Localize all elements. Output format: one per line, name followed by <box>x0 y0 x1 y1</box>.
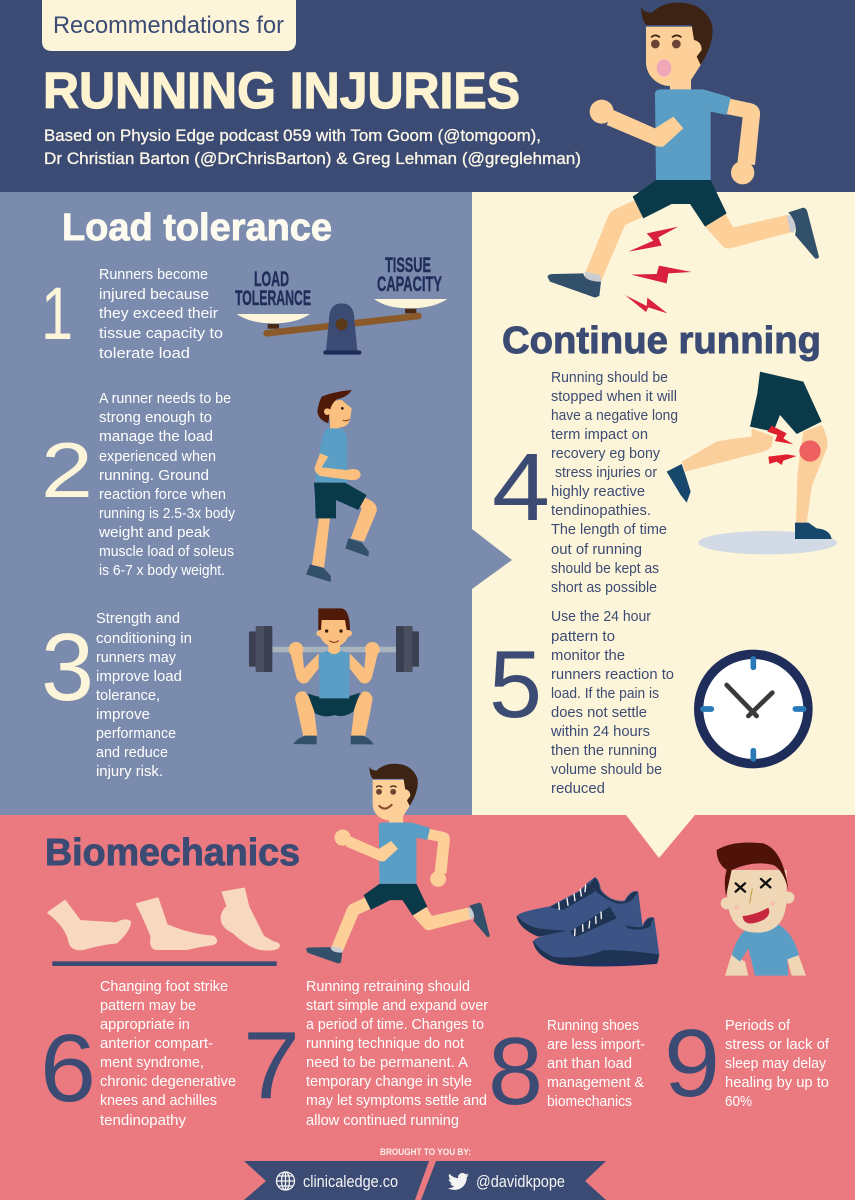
text block 3: Strength and <box>96 610 180 627</box>
icon: balance scale: LOAD <box>254 268 289 291</box>
text block 3: improve <box>96 706 150 723</box>
text block 2: weight and peak <box>98 524 211 541</box>
text block 3: injury risk. <box>96 763 163 780</box>
text block 2: is 6-7 x body weight. <box>99 562 225 579</box>
icon: running shoes <box>517 877 658 966</box>
text block 8: are less import- <box>547 1036 645 1053</box>
icon: man squatting with barbell <box>249 608 419 744</box>
heading: continue running: Continue running <box>502 320 821 362</box>
text block 7: a period of time. Changes to <box>306 1016 484 1033</box>
text block 4 <box>551 369 678 596</box>
tag: recommendations for <box>42 0 296 51</box>
ribbon: clinicaledge.co <box>244 1161 429 1200</box>
number 7: 7 <box>243 1012 300 1119</box>
text block 4: Running should be <box>551 369 668 386</box>
text block 7: running technique do not <box>306 1035 465 1052</box>
text block 3: conditioning in <box>96 630 192 647</box>
text block 2: A runner needs to be <box>99 390 231 407</box>
text block 5: does not settle <box>551 704 647 721</box>
icon: clock <box>694 650 813 768</box>
number 8: 8 <box>488 1018 543 1125</box>
text block 8: management & <box>547 1074 644 1091</box>
number 5: 5 <box>489 631 542 738</box>
text block 7 <box>306 978 488 1129</box>
text block 4: recovery eg bony <box>551 445 660 462</box>
heading: biomechanics: Biomechanics <box>45 832 300 874</box>
subtitle <box>44 126 581 168</box>
text block 3: performance <box>96 725 176 742</box>
text block 7: temporary change in style <box>306 1073 472 1090</box>
text block 4: tendinopathies. <box>551 502 651 519</box>
text block 9: stress or lack of <box>725 1036 830 1053</box>
text block 9: 60% <box>725 1093 752 1110</box>
text block 8: Running shoes <box>547 1017 639 1034</box>
number 1: 1 <box>41 272 73 355</box>
text block 6: appropriate in <box>100 1016 190 1033</box>
text block 4: term impact on <box>551 426 648 443</box>
text block 6: knees and achilles <box>100 1092 217 1109</box>
number 6: 6 <box>40 1015 96 1122</box>
text block 6 <box>100 978 236 1129</box>
text block 2: experienced when <box>99 448 216 465</box>
text block 6: Changing foot strike <box>100 978 228 995</box>
text block 7: allow continued running <box>306 1112 459 1129</box>
text block 6: pattern may be <box>100 997 196 1014</box>
icon: injured runner with lightning bolts <box>547 3 819 313</box>
text block 3: and reduce <box>96 744 168 761</box>
text block 1 <box>99 266 223 362</box>
text block 7: need to be permanent. A <box>306 1054 468 1071</box>
text block 2 <box>98 390 235 579</box>
text block 5: reduced <box>551 780 605 797</box>
text block 2: reaction force when <box>99 486 226 503</box>
ribbon: @davidkpope: @davidkpope <box>476 1172 565 1191</box>
text block 1: Runners become <box>99 266 208 283</box>
number 2: 2 <box>41 426 93 514</box>
number 4: 4 <box>492 434 550 541</box>
text block 3: improve load <box>96 668 182 685</box>
text: brought to you by: BROUGHT TO YOU BY: <box>380 1147 471 1157</box>
icon: balance scale: CAPACITY <box>377 273 442 296</box>
icon: three feet <box>48 889 279 966</box>
icon: tired face man <box>717 842 806 976</box>
text block 5: monitor the <box>551 647 625 664</box>
text block 4: out of running <box>551 541 642 558</box>
text block 9: sleep may delay <box>725 1055 826 1072</box>
icon: balance scale: TISSUE <box>385 254 431 277</box>
text block 1: injured because <box>99 286 209 303</box>
text block 5: Use the 24 hour <box>551 608 651 625</box>
ribbon: @davidkpope <box>421 1161 606 1200</box>
text block 2: manage the load <box>99 428 213 445</box>
text block 5 <box>550 608 674 797</box>
text block 8: ant than load <box>547 1055 632 1072</box>
icon: man stepping up <box>306 390 377 582</box>
tag: recommendations for: Recommendations for <box>53 12 284 39</box>
text block 4: have a negative long <box>551 407 678 424</box>
text block 6: chronic degenerative <box>100 1073 236 1090</box>
icon: balance scale <box>235 254 447 355</box>
text block 6: anterior compart- <box>100 1035 213 1052</box>
panel: biomechanics <box>0 815 855 1200</box>
icon: happy runner <box>306 764 490 964</box>
text block 6: tendinopathy <box>100 1112 187 1129</box>
text block 5: then the running <box>551 742 657 759</box>
text block 5: volume should be <box>551 761 662 778</box>
text block 4: highly reactive <box>551 483 645 500</box>
text block 3 <box>96 610 192 780</box>
arrow: pointer to the right <box>472 529 512 589</box>
subtitle: Dr Christian Barton (@DrChrisBarton) & Greg Lehman (@greglehman) <box>44 149 581 168</box>
text block 4: should be kept as <box>551 560 659 577</box>
subtitle: Based on Physio Edge podcast 059 with Tom Goom (@tomgoom), <box>44 126 541 145</box>
text block 8 <box>547 1017 645 1110</box>
number 9: 9 <box>664 1010 720 1117</box>
text block 5: pattern to <box>551 628 615 645</box>
icon: injured knee <box>667 372 837 554</box>
text block 4: The length of time <box>551 521 667 538</box>
number 3: 3 <box>41 614 94 721</box>
arrow: cream pointer down <box>626 815 695 858</box>
text block 4: stress injuries or <box>555 464 657 481</box>
text block 1: tissue capacity to <box>99 325 223 342</box>
text block 7: start simple and expand over <box>306 997 488 1014</box>
heading: load tolerance: Load tolerance <box>62 207 332 249</box>
text block 1: tolerate load <box>99 345 190 362</box>
text block 2: running. Ground <box>99 467 209 484</box>
text block 3: tolerance, <box>96 687 160 704</box>
text block 6: ment syndrome, <box>100 1054 204 1071</box>
panel: load tolerance <box>0 192 512 815</box>
title: RUNNING INJURIES <box>43 62 520 119</box>
ribbon: clinicaledge.co: clinicaledge.co <box>303 1172 398 1191</box>
text block 5: runners reaction to <box>551 666 674 683</box>
panel: continue running <box>472 192 855 815</box>
text block 9: healing by up to <box>725 1074 829 1091</box>
text block 5: within 24 hours <box>550 723 650 740</box>
text block 5: load. If the pain is <box>551 685 659 702</box>
text block 3: runners may <box>96 649 176 666</box>
icon: balance scale: TOLERANCE <box>235 287 311 310</box>
text block 1: they exceed their <box>99 305 218 322</box>
text block 2: strong enough to <box>99 409 212 426</box>
text block 7: Running retraining should <box>306 978 470 995</box>
text block 2: running is 2.5-3x body <box>99 505 235 522</box>
text block 8: biomechanics <box>547 1093 632 1110</box>
text block 2: muscle load of soleus <box>99 543 234 560</box>
panel: header <box>0 0 855 192</box>
text block 4: short as possible <box>551 579 657 596</box>
text block 4: stopped when it will <box>551 388 677 405</box>
text block 9 <box>725 1017 830 1110</box>
text block 9: Periods of <box>725 1017 791 1034</box>
text block 7: may let symptoms settle and <box>306 1092 487 1109</box>
